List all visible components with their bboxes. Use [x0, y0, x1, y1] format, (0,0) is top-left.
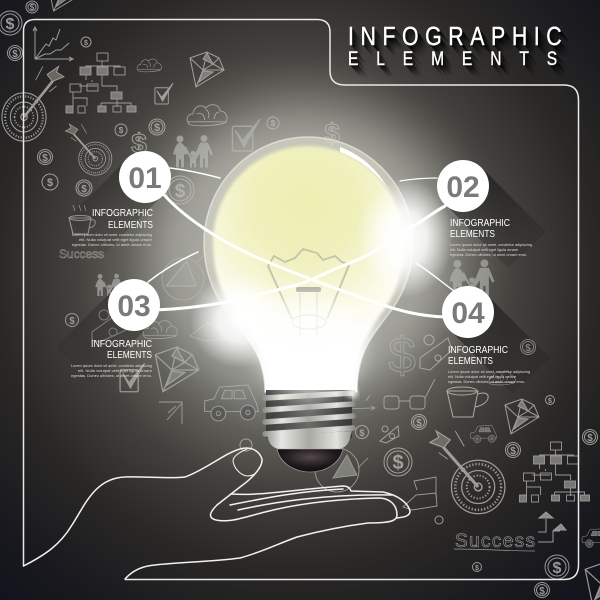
connectors [148, 168, 454, 317]
coin [166, 176, 194, 204]
text block 01: egestas. Donec ultricies, ut amet ornare eros. [72, 242, 152, 247]
icon: coin large [545, 555, 569, 579]
icon: coin [534, 582, 550, 598]
coin: $ [30, 3, 35, 12]
icon: arrow [340, 395, 375, 410]
flare lower left [190, 272, 290, 368]
circle 02: 02 [446, 171, 480, 204]
screw base [265, 390, 353, 472]
icon: diamond cut [585, 562, 600, 600]
coin [38, 150, 52, 164]
neck glow [230, 316, 387, 392]
icon: coin: $ [69, 316, 75, 327]
flare neck [258, 295, 362, 395]
icon: coin [66, 314, 78, 327]
text block 02: Lorem ipsum dolor sit amet, constetur adipiscing [450, 242, 532, 247]
icon: diamond top cut [48, 0, 80, 11]
icon: coin: $ [475, 565, 479, 572]
icon: chart arrow [159, 402, 182, 424]
hand outline [24, 448, 410, 579]
icon: big dollar: $ [388, 327, 416, 383]
text block 02: ELEMENTS [450, 229, 495, 240]
big dollar: $ [324, 118, 340, 149]
coin: $ [84, 40, 88, 47]
text block 02 [450, 218, 532, 257]
icon: growth arrows [538, 512, 566, 542]
coin [42, 174, 58, 190]
icon: coffee cup [447, 387, 488, 417]
coin [81, 37, 91, 47]
text block 01 [72, 208, 153, 247]
sketch icons: left middle [59, 205, 258, 424]
coin: $ [6, 16, 15, 33]
icon: diamond [505, 399, 539, 434]
icon: clouds [489, 371, 515, 385]
icon: org chart [66, 53, 136, 113]
icon: car small [471, 425, 497, 443]
coin [8, 46, 22, 60]
coin [0, 11, 22, 35]
filament [268, 249, 349, 337]
highlight [340, 147, 390, 192]
icon: coffee cup [69, 205, 95, 234]
flare screw highlight [347, 388, 357, 398]
text block 02: INFOGRAPHIC [450, 218, 510, 229]
coin: $ [47, 177, 53, 189]
icon: shape wedge [190, 323, 240, 341]
icon: coin [435, 516, 443, 524]
text block 03: Lorem ipsum dolor sit amet, constetur adipiscing [71, 363, 152, 368]
icon: target dart [65, 124, 112, 175]
coin: $ [119, 126, 124, 135]
circle 02 [437, 160, 489, 212]
icon: family left [95, 274, 123, 296]
text block 04 [448, 345, 530, 384]
title line 1: INFOGRAPHIC [348, 21, 568, 51]
icon: pie chart below bulb [315, 448, 368, 492]
text block 03: INFOGRAPHIC [91, 339, 152, 350]
icon: coin large: $ [553, 560, 562, 577]
icon: percent [380, 426, 399, 443]
coin: $ [81, 184, 87, 195]
curve 01 to 04 [160, 190, 445, 317]
circle 03 [108, 279, 160, 331]
black tip [277, 449, 343, 472]
icon: coin: $ [548, 398, 552, 405]
icon: coin large [384, 448, 412, 476]
filament plate [296, 287, 321, 292]
icon: clouds [143, 321, 177, 339]
curve 02 to 03 [155, 206, 445, 310]
shadow 01 [67, 159, 163, 255]
text block 01: Lorem ipsum dolor sit amet, constetur adipiscing [72, 232, 152, 237]
light flares [190, 178, 453, 398]
icon: family right [450, 259, 494, 296]
coin [115, 124, 127, 136]
icon: coin [506, 442, 520, 458]
icon: coin [412, 414, 426, 430]
coin: $ [175, 181, 186, 202]
circle 04: 04 [451, 297, 485, 330]
shadow 02 [445, 168, 546, 268]
text block 03: elit. Nulla volutpat velit eget ligula ornare [78, 368, 153, 373]
sketch icons: top left [2, 0, 260, 175]
icon: coin [582, 430, 598, 444]
circle 01: 01 [128, 162, 162, 195]
coin [267, 117, 279, 129]
line 01 [170, 168, 220, 178]
line 04 [416, 263, 454, 291]
icon: laptop [403, 477, 437, 510]
big dollar: $ [131, 128, 147, 159]
halo around bulb [158, 105, 458, 385]
collar [267, 431, 352, 449]
sketch icons: right side [240, 259, 600, 600]
shadow 04 [450, 294, 550, 394]
icon: success label: Success [59, 247, 104, 261]
text block 04: ELEMENTS [448, 356, 493, 367]
icon: coin [546, 396, 554, 405]
icon: coin: $ [510, 446, 516, 457]
icon: glasses [384, 379, 435, 409]
coin [149, 119, 165, 135]
icon: coin [356, 426, 368, 438]
icon: percent block [92, 310, 126, 342]
icon: target dart left [2, 66, 64, 141]
long shadows behind number circles [56, 159, 550, 394]
text block 04: INFOGRAPHIC [448, 345, 508, 356]
text block 01: INFOGRAPHIC [92, 208, 153, 219]
text block 02: elit. Nulla volutpat velit eget ligula ornare [450, 247, 519, 252]
icon: diamond [155, 347, 199, 392]
icon: coin large: $ [392, 452, 404, 474]
icon: pie chart [162, 250, 210, 300]
circle 01 [119, 151, 171, 203]
icon: coin [520, 340, 536, 354]
icon: check box [155, 83, 173, 104]
icon: coin: $ [416, 418, 422, 429]
coin [26, 1, 38, 13]
icon: check box large [232, 119, 260, 151]
circle 04 [442, 286, 494, 338]
icon: car cut [582, 529, 600, 547]
shadow 03 [56, 287, 152, 383]
icon: coin: $ [525, 343, 531, 354]
icon: family [173, 135, 213, 168]
coin [76, 180, 92, 196]
text block 03: ELEMENTS [107, 350, 152, 361]
title line 2: ELEMENTS [348, 49, 575, 70]
icon: org chart [520, 442, 590, 502]
icon: coin [472, 562, 482, 572]
circle 03: 03 [117, 290, 151, 323]
icon: clouds small [137, 59, 161, 72]
text block 03 [71, 339, 153, 378]
icon: coin near thumb [240, 439, 252, 451]
light bulb [204, 137, 413, 472]
bulb glass [204, 137, 413, 392]
icon: car [205, 385, 258, 421]
icon: coin: $ [587, 433, 593, 444]
coins: top left [0, 1, 340, 204]
text block 04: Lorem ipsum dolor sit amet, constetur adipiscing [448, 369, 530, 374]
icon: coin: $ [359, 428, 365, 438]
icon: diamond [190, 52, 224, 87]
icon: percent block [420, 335, 452, 370]
icon: coin: $ [539, 586, 545, 597]
coin: $ [12, 49, 18, 60]
text block 01: ELEMENTS [108, 220, 153, 231]
text block 01: elit. Nulla volutpat velit eget ligula ornare [79, 237, 153, 242]
icon: line chart [33, 27, 73, 61]
flare right [357, 178, 453, 298]
text block 04: egestas. Donec ultricies, ut amet ornare eros. [448, 379, 525, 384]
text block 04: elit. Nulla volutpat velit eget ligula ornare [448, 374, 517, 379]
icon: check box [120, 363, 145, 392]
bulb inner fill [213, 146, 404, 392]
icon: success: Success [455, 531, 535, 552]
line 03 [148, 252, 198, 282]
coin: $ [42, 153, 48, 164]
coin: $ [271, 119, 276, 128]
coin: $ [154, 122, 160, 134]
line 02 [400, 178, 437, 181]
text block 03: egestas. Donec ultricies, ut amet ornare eros. [71, 373, 152, 378]
text block 02: egestas. Donec ultricies, ut amet ornare eros. [450, 252, 527, 257]
icon: target dart [430, 431, 505, 514]
icon: clouds [187, 105, 227, 126]
